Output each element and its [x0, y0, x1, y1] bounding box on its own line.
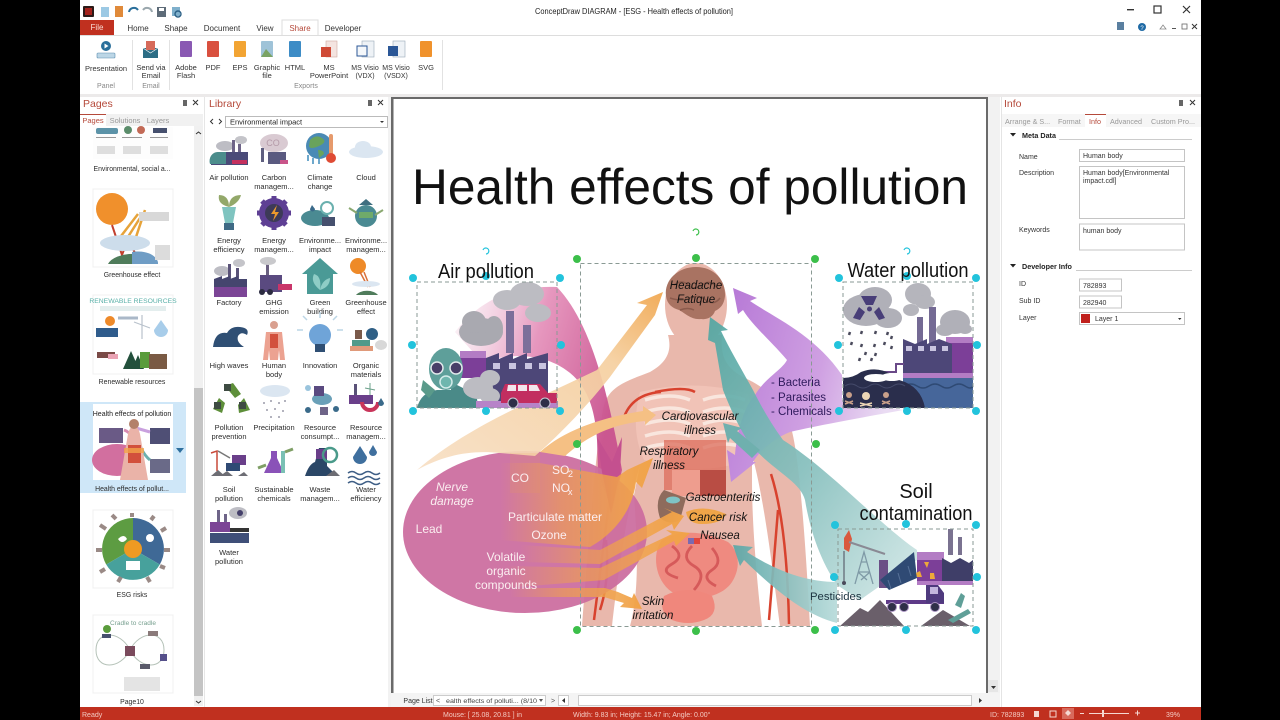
library selector	[226, 116, 388, 128]
arrow: orange to respiratory	[500, 458, 653, 547]
library item: greenhouse effect	[345, 258, 387, 316]
page thumbnail: health effects (selected): Health effects of pollution	[93, 411, 171, 418]
label: nerve damage	[430, 480, 474, 508]
ribbon: exports group: PDF	[206, 63, 221, 72]
ribbon tabs: Home	[127, 24, 149, 33]
ribbon: exports group: Presentation	[85, 64, 127, 73]
selection: human body	[573, 229, 820, 635]
panel: library	[204, 97, 391, 707]
label: water contaminants: - Parasites	[771, 392, 826, 404]
page thumbnail: health effects (selected): Health effects of pollut...	[95, 486, 169, 493]
panel: info: Arrange & S...	[1005, 117, 1050, 126]
label: cardiovascular illness: Cardiovascular	[662, 411, 740, 423]
label: respiratory illness: illness	[653, 460, 685, 472]
ribbon: exports group: Panel	[97, 83, 115, 90]
library item: resource management: Resource	[350, 423, 382, 432]
library item: carbon management	[254, 134, 294, 191]
label: volatile organic compounds: organic	[486, 564, 526, 578]
library item: human body	[262, 321, 286, 379]
ribbon: exports group: MS Visio	[382, 65, 410, 72]
panel: pages	[80, 98, 203, 706]
label: cancer risk: Cancer risk	[689, 512, 748, 524]
library item: energy management: managem...	[254, 245, 294, 254]
library item: energy management	[254, 196, 294, 254]
brain	[666, 267, 725, 319]
library item: pollution prevention: prevention	[211, 432, 247, 441]
library item: pollution prevention: Pollution	[215, 423, 243, 432]
window title: ConceptDraw DIAGRAM - [ESG - Health effects of pollution]	[535, 7, 733, 16]
page thumbnail: environmental: Environmental, social a...	[94, 166, 171, 173]
page list bar: Page List	[403, 698, 433, 705]
label: nox: NO	[552, 481, 570, 495]
library item: innovation: Innovation	[303, 361, 337, 370]
icon: presentation	[97, 41, 115, 58]
library item: cloud: Cloud	[356, 173, 376, 182]
ribcage	[636, 385, 753, 469]
label: skin irritation: irritation	[633, 610, 673, 622]
meta data section	[1010, 131, 1192, 250]
library item: resource consumption: consumpt...	[301, 432, 339, 441]
label: volatile organic compounds	[475, 550, 537, 592]
arrow: orange to skin	[510, 588, 642, 609]
developer info section: Layer	[1019, 315, 1037, 322]
library item: ghg emission: GHG	[265, 298, 283, 307]
veins	[594, 389, 789, 624]
page thumbnail: renewable resources: RENEWABLE RESOURCES	[89, 298, 177, 305]
label: nausea: Nausea	[700, 530, 740, 542]
library item: organic materials: Organic	[353, 361, 379, 370]
icon: adobe flash	[180, 41, 192, 57]
library item: ghg emission: emission	[259, 307, 289, 316]
library item: environmental impact: Environme...	[299, 236, 341, 245]
meta data section: Keywords	[1019, 227, 1050, 234]
library item: air pollution	[209, 136, 249, 182]
developer info section: Layer 1	[1095, 316, 1118, 323]
meta data section: Meta Data	[1022, 131, 1057, 140]
label: water contaminants	[771, 377, 832, 418]
panel: library: Library	[209, 98, 242, 110]
developer info section: Developer Info	[1022, 262, 1073, 271]
label: nox: x	[568, 487, 573, 497]
library item: air pollution: Air pollution	[209, 173, 249, 182]
arrow: teal from soil to head	[708, 317, 917, 600]
icon: html	[289, 41, 301, 57]
library item: water pollution	[210, 507, 249, 566]
ribbon tabs: File	[91, 23, 104, 32]
ribbon: exports group: Email	[142, 83, 160, 90]
library item: high waves	[210, 327, 249, 370]
pale orange arrow band	[417, 292, 663, 470]
ribbon tabs	[80, 20, 1201, 36]
arrow: teal to cardiovascular	[723, 423, 760, 458]
panel: pages: Pages	[83, 98, 113, 110]
title: Health effects of pollution	[412, 159, 968, 215]
status bar: ID: 782893	[990, 712, 1024, 719]
label: water contaminants: - Chemicals	[771, 406, 832, 418]
ribbon: exports group	[85, 40, 443, 90]
canvas area	[391, 97, 1001, 693]
label: water contaminants: - Bacteria	[771, 377, 821, 389]
library item: greenhouse effect: Greenhouse	[345, 298, 387, 307]
ribbon tabs: Shape	[164, 24, 188, 33]
panel: info: Info	[1089, 117, 1101, 126]
kidney accent	[688, 538, 694, 544]
ribbon: exports group: Adobe	[175, 63, 197, 72]
library item: carbon management: CO	[266, 138, 280, 148]
library item: organic materials: materials	[351, 370, 381, 379]
panel: info: Custom Pro...	[1151, 117, 1195, 126]
ribbon: exports group: MS Visio	[351, 65, 379, 72]
label: ozone: Ozone	[531, 528, 567, 542]
label: gastroenteritis: Gastroenteritis	[686, 492, 761, 504]
panel: pages: Layers	[147, 116, 170, 125]
label: skin irritation: Skin	[642, 596, 664, 608]
arrow: orange to nausea	[505, 530, 690, 588]
library item: water pollution: Water	[219, 548, 239, 557]
page list bar: <	[436, 698, 440, 705]
library item: sustainable chemicals: Sustainable	[254, 485, 294, 494]
page thumbnail: renewable resources	[89, 295, 177, 386]
meta data section: Human body	[1083, 153, 1123, 160]
arrow: purple from water pollution	[727, 288, 903, 482]
library item: water efficiency: efficiency	[350, 494, 382, 503]
library item: climate change: change	[308, 182, 332, 191]
heading: soil contamination: contamination	[860, 503, 972, 525]
label: headache fatigue	[670, 280, 722, 306]
label: headache fatigue: Fatique	[677, 294, 715, 306]
library item: pollution prevention	[211, 383, 250, 441]
library item: environmental management: managem...	[346, 245, 386, 254]
ribbon: exports group: EPS	[232, 63, 248, 72]
library item: energy efficiency	[213, 195, 245, 254]
icon: eps	[234, 41, 246, 57]
selection: air pollution	[408, 248, 565, 415]
library item: sustainable chemicals: chemicals	[257, 494, 291, 503]
status bar: Ready	[82, 712, 103, 719]
status bar: Width: 9.83 in; Height: 15.47 in; Angle: 0.00°	[573, 711, 711, 719]
library item: organic materials	[350, 328, 387, 379]
label: respiratory illness	[640, 446, 700, 472]
library item: soil pollution	[211, 451, 248, 503]
page thumbnail: page 10: Cradle to cradle	[110, 620, 156, 627]
ribbon tabs: Developer	[325, 24, 362, 33]
label: particulate matter: Particulate matter	[508, 510, 602, 524]
library item: factory	[214, 259, 247, 307]
arrow: orange to cancer risk	[520, 508, 684, 564]
library item: green building: Green	[310, 298, 330, 307]
library selector: Environmental impact	[230, 118, 303, 126]
library item: environmental management: Environme...	[345, 236, 387, 245]
developer info section: Sub ID	[1019, 298, 1040, 305]
label: volatile organic compounds: Volatile	[487, 550, 526, 564]
library item: resource consumption: Resource	[304, 423, 336, 432]
library item: climate change: Climate	[307, 173, 333, 182]
ribbon: exports group: file	[262, 71, 272, 80]
selection: water pollution	[834, 248, 981, 415]
page list bar: >	[551, 698, 555, 705]
panel: info: Advanced	[1110, 117, 1142, 126]
page thumbnail: greenhouse effect	[93, 189, 173, 279]
heading: soil contamination: Soil	[899, 481, 933, 503]
page thumbnail: greenhouse effect: Greenhouse effect	[104, 272, 160, 279]
library item: water pollution: pollution	[215, 557, 243, 566]
ribbon: exports group: Email	[142, 71, 161, 80]
ribbon tabs: Document	[204, 24, 241, 33]
label: co: CO	[511, 471, 529, 485]
icon: send via email	[143, 41, 158, 58]
label: cardiovascular illness	[662, 411, 740, 437]
pink air pollution arrow	[455, 287, 622, 512]
bladder	[662, 590, 715, 623]
library item: environmental impact: impact	[309, 245, 332, 254]
heading: soil contamination	[860, 481, 972, 525]
icon: graphic file	[261, 41, 273, 57]
library item: ghg emission	[259, 257, 292, 316]
page thumbnail: health effects (selected)	[80, 402, 186, 493]
library item: human body: body	[266, 370, 282, 379]
ribbon tabs: Share	[289, 24, 311, 33]
ribbon: exports group: Graphic	[254, 63, 280, 72]
icon: visio vdx	[357, 41, 374, 57]
page thumbnail: renewable resources: Renewable resources	[99, 379, 166, 386]
library item: waste management: Waste	[310, 485, 330, 494]
quick access toolbar	[83, 6, 181, 17]
library item: factory: Factory	[216, 298, 242, 307]
intestines	[656, 533, 738, 598]
library item: human body: Human	[262, 361, 286, 370]
library item: sustainable chemicals	[254, 449, 294, 503]
library item: energy management: Energy	[262, 236, 286, 245]
label: lead: Lead	[416, 522, 442, 536]
developer info section: ID	[1019, 281, 1026, 288]
ribbon: exports group: (VDX)	[355, 73, 375, 80]
library item: resource management: managem...	[346, 432, 386, 441]
library item: waste management: managem...	[300, 494, 340, 503]
ribbon: exports group: Flash	[177, 71, 195, 80]
library item: climate change	[306, 133, 336, 191]
status bar: 39%	[1166, 712, 1180, 719]
label: skin irritation	[633, 596, 673, 622]
page thumbnail: page 10: Page10	[120, 699, 144, 706]
library item: cloud	[349, 141, 383, 182]
library item: carbon management: Carbon	[262, 173, 286, 182]
page thumbnail: esg risks: ESG risks	[117, 592, 148, 599]
heading: water pollution: Water pollution	[848, 260, 968, 282]
label: nerve damage: Nerve	[436, 480, 468, 494]
label: respiratory illness: Respiratory	[640, 446, 700, 458]
library item: soil pollution: pollution	[215, 494, 243, 503]
label: cardiovascular illness: illness	[684, 425, 716, 437]
arrow: teal to nausea	[733, 545, 837, 623]
meta data section: Description	[1019, 170, 1054, 177]
heading: air pollution: Air pollution	[438, 261, 534, 283]
status bar: Mouse: [ 25.08, 20.81 ] in	[443, 712, 522, 719]
label: so2: SO	[552, 463, 569, 477]
status bar	[80, 707, 1201, 720]
panel: pages: Solutions	[110, 116, 141, 125]
meta data section: Human body[Environmental	[1083, 170, 1170, 177]
ribbon tabs: View	[256, 24, 274, 33]
icon: visio vsdx	[388, 41, 405, 57]
library item: precipitation: Precipitation	[253, 423, 295, 432]
page list bar: ealth effects of polluti... (8/10	[446, 698, 537, 705]
label: volatile organic compounds: compounds	[475, 578, 537, 592]
ribbon: exports group: MS	[323, 63, 335, 72]
library item: precipitation	[253, 385, 295, 432]
ribbon: exports group: Exports	[294, 83, 318, 90]
library item: resource management	[346, 383, 386, 441]
arrow: orange to cardiovascular	[540, 406, 656, 456]
developer info section: 782893	[1083, 283, 1106, 290]
library item: resource consumption	[301, 385, 339, 441]
panel: info: Info	[1004, 98, 1022, 110]
icon: powerpoint	[321, 41, 337, 57]
human body	[582, 263, 810, 626]
meta data section: Name	[1019, 154, 1038, 161]
label: headache fatigue: Headache	[670, 280, 722, 292]
illustration: air pollution	[417, 282, 558, 408]
label: nerve damage: damage	[430, 494, 474, 508]
ribbon: exports group: HTML	[285, 63, 305, 72]
icon: svg	[420, 41, 432, 57]
muscle torso	[664, 440, 726, 490]
window buttons: ?	[1140, 26, 1144, 32]
panel: info: Format	[1058, 117, 1081, 126]
library item: energy efficiency: efficiency	[213, 245, 245, 254]
page thumbnail: environmental	[93, 126, 173, 173]
illustration: soil contamination	[840, 529, 973, 626]
library item: environmental management	[345, 199, 387, 254]
page thumbnail: esg risks	[93, 510, 173, 599]
faint orange block behind CO	[510, 453, 540, 493]
pink arrowhead	[597, 437, 622, 514]
library item: high waves: High waves	[210, 361, 249, 370]
illustration: water pollution	[843, 283, 973, 408]
library item: water efficiency: Water	[356, 485, 376, 494]
window buttons	[1117, 6, 1197, 32]
selection: soil contamination	[830, 520, 981, 634]
library item: waste management	[300, 448, 340, 503]
meta data section: human body	[1083, 228, 1122, 235]
ribbon: exports group: Send via	[136, 63, 166, 72]
library item: energy efficiency: Energy	[217, 236, 241, 245]
icon: pdf	[207, 41, 219, 57]
ribbon: exports group: (VSDX)	[384, 73, 408, 80]
page list bar	[391, 693, 1001, 707]
developer info section	[1010, 262, 1192, 324]
library item: innovation	[297, 312, 343, 370]
label: so2: 2	[568, 469, 573, 479]
library item: water efficiency	[348, 445, 382, 503]
library item: green building: building	[307, 307, 333, 316]
library item: environmental impact	[299, 202, 341, 254]
developer info section: 282940	[1083, 300, 1106, 307]
library item: green building	[302, 258, 338, 316]
ribbon: exports group: PowerPoint	[310, 71, 349, 80]
library item: carbon management: managem...	[254, 182, 294, 191]
label: pesticides: Pesticides	[810, 591, 862, 603]
page thumbnail: page 10	[93, 615, 173, 706]
ribbon: exports group: SVG	[418, 63, 434, 72]
pink ellipse: air pollutants	[403, 451, 647, 613]
panel: pages: Pages	[82, 116, 104, 125]
meta data section: impact.cdl]	[1083, 178, 1117, 185]
panel: info	[1000, 97, 1201, 707]
library item: soil pollution: Soil	[223, 485, 236, 494]
library item: greenhouse effect: effect	[357, 307, 376, 316]
